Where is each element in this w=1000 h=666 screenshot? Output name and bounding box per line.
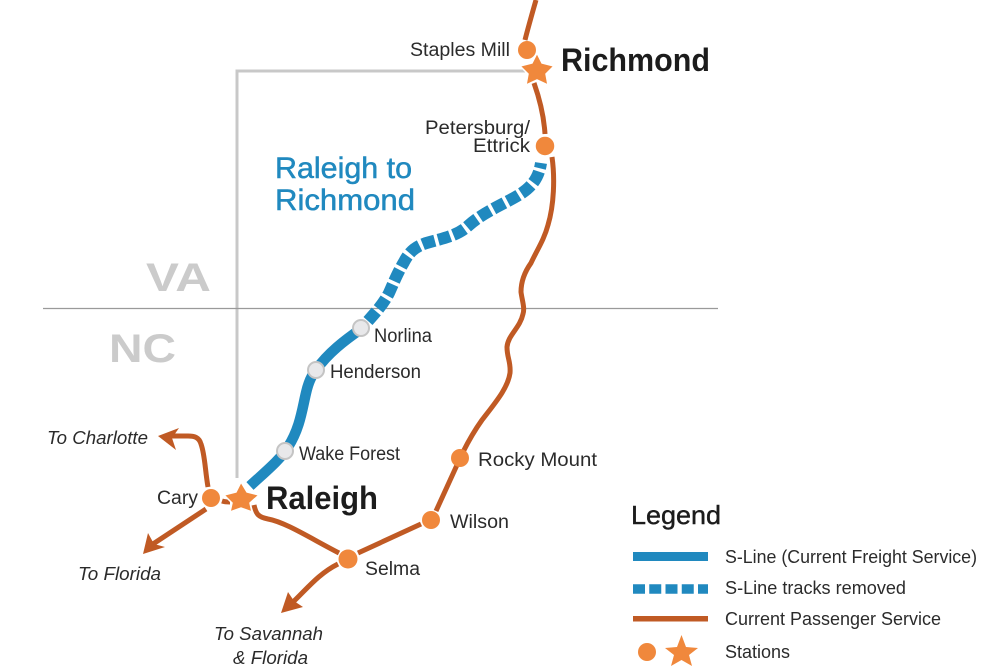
label: Petersburg/Ettrick: Petersburg/ — [425, 118, 531, 139]
legend item: S-Line tracks removed: S-Line tracks removed — [725, 578, 906, 598]
label: Petersburg/Ettrick: Ettrick — [473, 136, 531, 157]
station: Henderson — [308, 362, 324, 378]
station star: Richmond — [520, 53, 554, 85]
label: Petersburg/Ettrick — [425, 118, 531, 157]
label: To Savannah and Florida: To Savannah — [214, 624, 323, 644]
station: Wake Forest — [277, 443, 293, 459]
city label: Richmond: Richmond — [561, 42, 710, 78]
station: Rocky Mount — [451, 449, 469, 467]
legend — [631, 500, 977, 666]
label: Norlina: Norlina — [374, 326, 432, 347]
state border line — [43, 308, 718, 310]
station: Staples Mill — [518, 41, 536, 59]
state label: VA: VA — [146, 256, 211, 300]
state label: NC: NC — [109, 327, 176, 371]
station: Petersburg/Ettrick — [535, 136, 555, 156]
label: To Charlotte: To Charlotte — [47, 428, 148, 448]
station: Norlina — [353, 320, 369, 336]
label: Wake Forest: Wake Forest — [299, 444, 401, 465]
label: Selma: Selma — [365, 559, 420, 580]
label: Staples Mill: Staples Mill — [410, 40, 510, 61]
heading: Raleigh to Richmond — [275, 152, 415, 217]
station: Selma — [338, 550, 358, 568]
legend title: Legend — [631, 500, 721, 530]
heading: Raleigh to Richmond: Richmond — [275, 184, 415, 217]
S-Line tracks removed — [368, 163, 541, 321]
label: To Florida: To Florida — [78, 564, 161, 584]
city label: Raleigh: Raleigh — [266, 480, 378, 516]
station star: Raleigh — [224, 482, 259, 512]
label: To Savannah and Florida — [214, 624, 323, 666]
label: Henderson: Henderson — [330, 362, 421, 383]
label: Cary: Cary — [157, 488, 199, 509]
legend item: stations: Stations — [725, 642, 790, 662]
legend item: S-Line current freight: S-Line (Current Freight Service) — [725, 547, 977, 567]
label: Rocky Mount: Rocky Mount — [478, 450, 598, 471]
legend item: stations — [638, 635, 790, 666]
heading: Raleigh to Richmond: Raleigh to — [275, 152, 412, 185]
arrow: to Florida — [143, 509, 206, 554]
label: Wilson: Wilson — [450, 512, 509, 533]
legend item: current passenger service: Current Passenger Service — [725, 609, 941, 629]
route outline: gray leader line — [237, 71, 525, 478]
station: Wilson — [422, 511, 440, 529]
S-Line current freight service — [250, 329, 361, 486]
current passenger service line — [222, 0, 554, 553]
station: Cary — [202, 489, 220, 507]
arrow: to Charlotte — [158, 428, 208, 487]
arrow: to Savannah and Florida — [281, 564, 338, 613]
